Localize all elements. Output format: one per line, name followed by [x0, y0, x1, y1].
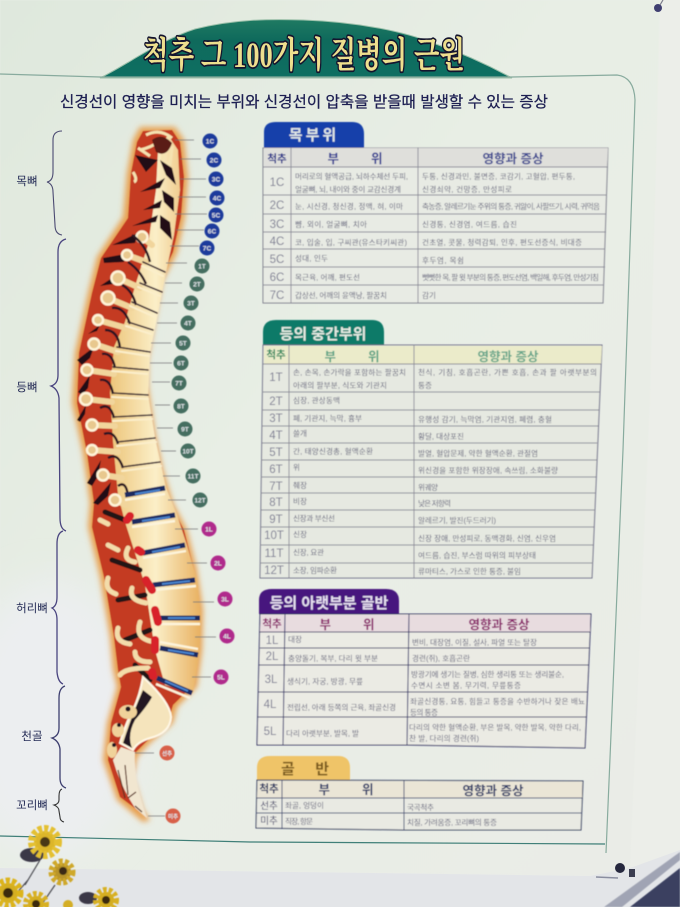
row 4T: 쓸개 — [293, 428, 307, 438]
row 1T: 아래의 팔부분, 식도와 기관지 — [293, 380, 387, 390]
brace: neck — [47, 131, 62, 235]
spine: transverse processes — [86, 237, 152, 505]
cervical markers: 3C — [212, 176, 220, 184]
thoracic markers: 10T — [182, 448, 194, 456]
row 12T — [264, 565, 521, 577]
lumbar markers: 4L — [223, 634, 231, 640]
row 6T: 6T — [269, 464, 283, 476]
dark floor corner — [604, 852, 680, 907]
row 1T: 손, 손목, 손가락을 포함하는 팔꿈치 — [293, 367, 406, 377]
tab: mid back — [263, 320, 384, 346]
thoracic markers: 3T — [187, 300, 195, 308]
thoracic markers: 8T — [177, 404, 185, 410]
table header: neck — [264, 148, 608, 167]
lumbar markers: 1L — [205, 526, 213, 534]
row 5C — [270, 253, 464, 266]
spine: thoracic facets — [80, 232, 148, 506]
row 4L: 4L — [264, 699, 277, 711]
flower 3 — [0, 881, 20, 905]
row 3C — [270, 219, 517, 231]
spine: red silhouette — [77, 130, 200, 812]
row 10T — [264, 529, 556, 543]
row 미추: 미추 — [260, 816, 278, 827]
row 5L: 찬 발, 다리의 경련(쥐) — [409, 733, 479, 743]
row 4L: 등의 통증 — [410, 707, 438, 717]
panel: neck section — [263, 122, 608, 303]
row 3L — [265, 669, 564, 690]
sacral markers — [160, 746, 180, 824]
table header: lower back — [260, 615, 590, 632]
row 10T: 신장 장애, 만성피로, 동맥경화, 신염, 신우염 — [418, 533, 556, 543]
row 미추: 직장, 항문 — [285, 816, 313, 826]
row 1T — [269, 367, 597, 390]
panel: lower back section — [257, 589, 591, 748]
flower 5 — [96, 890, 116, 907]
subtitle: 신경선이 영향을 미치는 부위와 신경선이 압축을 받을때 발생할 수 있는 증상 — [60, 93, 548, 111]
row 5L: 5L — [264, 726, 277, 738]
row 4L: 전립선, 아래 등쪽의 근육, 좌골신경 — [287, 702, 396, 712]
cervical markers: 4C — [213, 196, 221, 202]
row 9T: 9T — [269, 514, 283, 526]
table frame: pelvis — [256, 780, 583, 830]
spine illustration — [72, 127, 203, 822]
row 5C: 성대, 인두 — [295, 253, 328, 263]
flower 1 — [32, 829, 58, 855]
tab text: pelvis: 골 반 — [281, 761, 329, 778]
row 4C — [270, 236, 582, 248]
row 선추: 선추 — [260, 801, 278, 812]
row 선추: 좌골, 엉덩이 — [285, 800, 324, 810]
row 7C: 갑상선, 어깨의 윤액낭, 팔꿈치 — [295, 290, 387, 300]
row 1C: 얼굴뼈, 뇌, 내이와 중이 교감신경계 — [295, 184, 401, 194]
table header: lower back: 척추 — [262, 617, 282, 630]
row 1C: 두통, 신경과민, 불면증, 코감기, 고혈압, 편두통, — [422, 171, 575, 181]
cervical markers: 7C — [203, 246, 211, 252]
region labels and braces — [16, 131, 66, 822]
tab: lower back — [259, 589, 399, 614]
table header: lower back: 영향과 증상 — [469, 617, 530, 632]
row 6T — [269, 463, 558, 476]
sacral markers: 미추 — [168, 812, 178, 820]
row 2C: 축농증, 알레르기눈 주위의 통증, 귀앓이, 사팔뜨기, 시력, 귀먹음 — [422, 201, 600, 211]
row 6C: 6C — [270, 272, 284, 284]
table header: mid back: 척추 — [266, 348, 286, 361]
row 6C: 목근육, 어깨, 편도선 — [295, 272, 360, 282]
row 12T: 류마티스, 가스로 인한 통증, 불임 — [418, 566, 521, 576]
tab: neck — [264, 122, 364, 148]
row 6T: 위신경을 포함한 위장장애, 속쓰림, 소화불량 — [418, 465, 558, 475]
pin: top right — [654, 0, 663, 12]
row 5T: 5T — [269, 447, 283, 459]
row 3C: 3C — [270, 219, 284, 231]
table header: neck: 척추 — [267, 152, 287, 165]
row 6C: 뻣뻣한 목, 팔 윗 부분의 통증, 편도선염, 백일해, 후두염, 만성기침 — [422, 272, 599, 282]
table header: mid back: 영향과 증상 — [478, 349, 539, 364]
title: 척추 그 100가지 질병의 근원 — [143, 35, 465, 75]
row 7T: 췌장 — [293, 480, 307, 490]
row 5T — [269, 446, 538, 459]
cervical markers: 6C — [208, 228, 216, 236]
thoracic markers: 9T — [181, 426, 189, 434]
row 8T — [269, 496, 451, 509]
brace: back — [51, 239, 66, 531]
cervical markers — [200, 134, 224, 256]
row 2L: 2L — [266, 651, 279, 663]
row 5L: 다리의 약한 혈액순환, 부은 발목, 약한 발목, 약한 다리, — [409, 722, 581, 732]
row 9T: 알레르기, 발진(두드러기) — [418, 515, 496, 525]
row 11T: 신장, 요관 — [293, 547, 324, 557]
row 2L: 경련(쥐), 호흡곤란 — [412, 653, 470, 663]
row 3T: 유행성 감기, 늑막염, 기관지염, 폐렴, 충혈 — [418, 414, 552, 424]
row 11T — [265, 547, 536, 560]
spine: orange glow — [72, 127, 203, 822]
row 6T: 위 — [293, 463, 300, 472]
thoracic markers: 7T — [175, 380, 183, 388]
panel: pelvis section — [256, 756, 583, 830]
row 7C: 7C — [270, 290, 284, 302]
row 2T: 2T — [269, 396, 283, 408]
row 7C — [270, 290, 436, 302]
row 3L: 생식기, 자궁, 방광, 무릎 — [287, 676, 363, 686]
spine: sacral back — [107, 705, 137, 758]
panel: mid back section — [260, 320, 602, 578]
spine: lumbar posterior arches — [100, 512, 158, 680]
thoracic markers — [172, 258, 210, 508]
row 3L: 수면시 소변 봄, 무기력, 무릎통증 — [411, 680, 521, 690]
lumbar markers: 2L — [214, 560, 222, 568]
thoracic markers: 5T — [179, 340, 187, 348]
row 2C: 눈, 시신경, 청신경, 정맥, 혀, 이마 — [295, 201, 403, 211]
row 12T: 소장, 임파순환 — [293, 565, 337, 575]
vertebra markers — [135, 134, 234, 824]
row 11T: 11T — [265, 548, 283, 560]
row 1T: 1T — [269, 372, 283, 384]
row 4T — [269, 428, 464, 442]
table header: pelvis: 영향과 증상 — [463, 783, 524, 798]
row 1T: 천식, 기침, 호흡곤란, 가쁜 호흡, 손과 팔 아랫부분의 — [418, 367, 597, 377]
row 5L — [264, 722, 581, 743]
spine: thoracic discs — [112, 262, 165, 471]
row 4L — [264, 696, 585, 717]
row 4C: 건초열, 콧물, 청력감퇴, 인후, 편도선증식, 비대증 — [422, 237, 582, 247]
spine: posterior dark arches — [100, 235, 150, 496]
spine: lumbar blue discs — [125, 488, 200, 698]
row 1L — [266, 634, 537, 647]
tab text: neck: 목부위 — [289, 127, 339, 144]
cervical markers: 1C — [206, 138, 214, 146]
wall below banner — [0, 850, 680, 907]
label: waist: 허리뼈 — [16, 602, 48, 615]
lumbar markers: 3L — [221, 596, 229, 604]
row 3L: 3L — [265, 674, 278, 686]
row 선추 — [260, 800, 434, 812]
cervical markers: 2C — [210, 158, 218, 164]
sunflowers — [0, 829, 116, 907]
table header: pelvis — [257, 781, 582, 798]
row 1T: 통증 — [418, 381, 432, 390]
row 4C: 코, 입술, 입, 구씨관(유스타키씨관) — [295, 237, 407, 247]
row 5C: 5C — [270, 254, 284, 266]
thoracic markers: 4T — [184, 320, 192, 328]
sacral markers: 선추 — [162, 750, 172, 758]
table header: lower back: 부 위 — [320, 618, 374, 632]
spine: coccyx — [113, 747, 147, 818]
row 3C: 신경통, 신경염, 여드름, 습진 — [422, 219, 517, 229]
row 1C: 머리로의 혈액공급, 뇌하수체선 두피, — [295, 171, 408, 181]
table header: neck: 영향과 증상 — [483, 151, 544, 166]
row 5L: 다리 아랫부분, 발목, 발 — [286, 728, 359, 738]
row 3T — [269, 413, 552, 425]
pin: bottom right — [596, 863, 635, 878]
leaders — [135, 140, 216, 816]
row 2T: 심장, 관상동맥 — [293, 395, 340, 405]
row 9T: 신장과 부신선 — [293, 513, 335, 523]
label: neck: 목뼈 — [16, 175, 38, 188]
row 11T: 여드름, 습진, 부스럼 따위의 피부상태 — [418, 550, 536, 560]
row 3L: 방광기에 생기는 질병, 심한 생리통 또는 생리불순, — [411, 669, 564, 679]
brace: tail — [54, 789, 64, 822]
spine: cervical detail — [133, 132, 172, 182]
row 5T: 간, 태양신경총, 혈액순환 — [293, 446, 373, 456]
thoracic markers: 12T — [194, 498, 206, 504]
soft light patch lower left — [0, 580, 140, 860]
tab text: lower back: 등의 아랫부분 골반 — [270, 595, 389, 612]
row 2T — [269, 395, 340, 408]
row 2L — [266, 651, 470, 663]
row 7T: 위궤양 — [418, 483, 438, 492]
tab: pelvis — [257, 756, 350, 780]
thoracic markers: 2T — [193, 282, 201, 288]
row 8T: 8T — [269, 497, 283, 509]
label: tail: 꼬리뼈 — [16, 799, 48, 812]
brace: sacrum — [52, 686, 66, 788]
table header: mid back: 부 위 — [324, 350, 380, 364]
row 7T: 7T — [269, 481, 283, 493]
spine: vertebral bodies — [110, 135, 201, 693]
row 8T: 비장 — [293, 496, 307, 506]
table header: neck: 부 위 — [328, 152, 382, 166]
tab text: mid back: 등의 중간부위 — [280, 326, 366, 343]
table frame: mid back — [260, 345, 602, 578]
row 4L: 좌골신경통, 요통, 힘들고 통증을 수반하거나 잦은 배뇨 — [410, 696, 585, 706]
row 1L: 변비, 대장염, 이질, 설사, 파열 또는 탈장 — [412, 637, 537, 647]
row 3T: 폐, 기관지, 늑막, 흉부 — [293, 413, 362, 423]
row 2C — [270, 200, 600, 212]
label: sacrum: 천골 — [21, 729, 43, 743]
row 2C: 2C — [270, 200, 284, 212]
row 7T — [269, 480, 438, 493]
lumbar markers: 5L — [217, 674, 225, 682]
panel bottom line — [0, 836, 605, 844]
leaves — [20, 848, 97, 904]
row 4T: 황달, 대상포진 — [418, 431, 464, 441]
spine: sacrum — [120, 677, 171, 750]
row 1C: 1C — [270, 177, 284, 189]
row 3C: 뺨, 외이, 얼굴뼈, 치아 — [295, 219, 367, 229]
table header: pelvis: 부 위 — [318, 783, 374, 797]
table header: pelvis: 척추 — [259, 782, 279, 795]
brace: waist — [52, 531, 63, 684]
row 2L: 충양돌기, 복부, 다리 윗 부분 — [288, 654, 378, 663]
row 선추: 국곡척추 — [407, 803, 434, 812]
row 1L: 1L — [266, 635, 279, 647]
title dome — [100, 20, 512, 78]
row 미추: 치질, 가려움증, 꼬리뼈의 통증 — [407, 817, 497, 827]
row 12T: 12T — [264, 565, 284, 577]
label: back: 등뼈 — [16, 381, 38, 394]
row 8T: 낮은 저항력 — [418, 498, 451, 508]
row 1C — [270, 171, 575, 194]
row 1C: 신경쇠약, 건망증, 만성피로 — [422, 184, 512, 194]
lumbar markers — [202, 522, 234, 684]
row 1L: 대장 — [288, 634, 302, 644]
row 5C: 후두염, 목쉼 — [422, 255, 464, 265]
thoracic markers: 11T — [188, 474, 198, 480]
flower 2 — [52, 862, 72, 882]
thoracic markers: 6T — [177, 360, 185, 368]
row 9T — [269, 513, 496, 526]
flower 6 — [63, 900, 73, 907]
row 10T: 신장 — [293, 529, 307, 539]
row 6C — [270, 272, 599, 284]
table header: mid back — [264, 346, 602, 364]
cervical markers: 5C — [212, 212, 220, 220]
flower 4 — [26, 894, 46, 907]
thoracic markers: 1T — [198, 264, 206, 270]
row 미추 — [260, 816, 497, 827]
row 4C: 4C — [270, 236, 284, 248]
row 10T: 10T — [264, 530, 284, 542]
stems — [15, 860, 55, 907]
table frame: lower back — [257, 614, 591, 748]
row 5T: 발열, 혈압문제, 약한 혈액순환, 관절염 — [418, 448, 538, 458]
row 7C: 감기 — [422, 290, 436, 300]
row 4T: 4T — [269, 430, 283, 442]
table frame: neck — [263, 148, 608, 303]
row 3T: 3T — [269, 413, 283, 425]
